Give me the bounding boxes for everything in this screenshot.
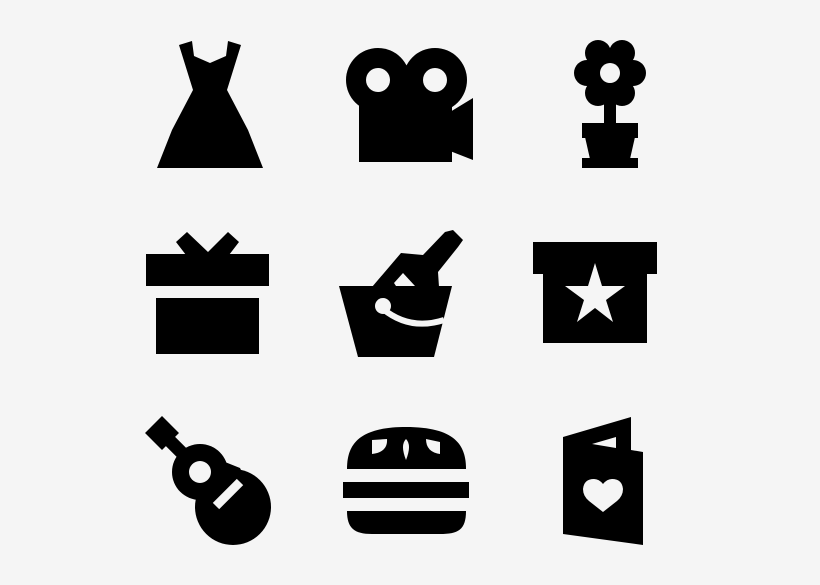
icon: guitar bbox=[145, 416, 271, 545]
icon: star box bbox=[533, 242, 657, 343]
icon: flower pot bbox=[574, 40, 646, 168]
icon: gift bbox=[146, 232, 269, 354]
icon: burger bbox=[343, 427, 469, 534]
icon: dress bbox=[157, 41, 263, 168]
icon: champagne bucket bbox=[339, 230, 463, 357]
icon: greeting card bbox=[563, 417, 643, 545]
icon: movie camera bbox=[346, 48, 473, 162]
